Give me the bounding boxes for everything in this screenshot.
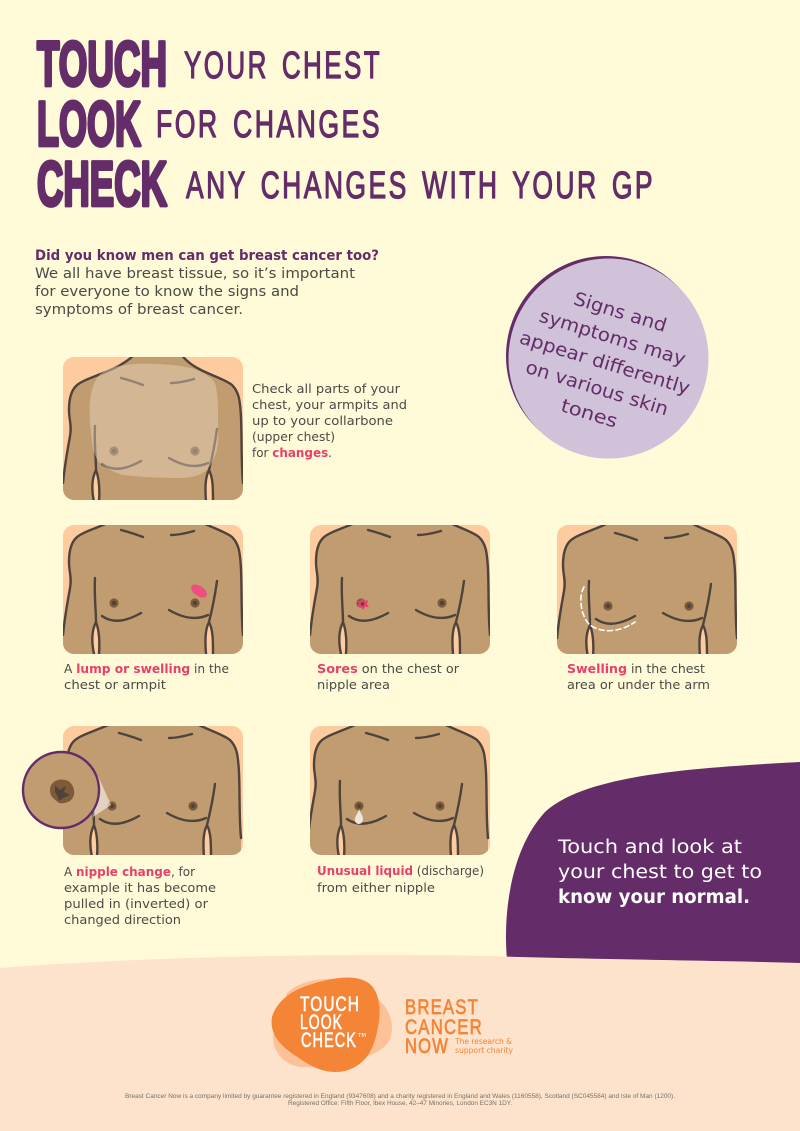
logo: breast cancer now: The research &: [454, 1037, 512, 1046]
logo: touch look check: CHECK: [301, 1029, 357, 1052]
title: [37, 30, 655, 220]
callout: skin tones: Signs and: [571, 289, 669, 337]
logo: touch look check: LOOK: [300, 1011, 343, 1034]
logo: breast cancer now: CANCER: [405, 1016, 483, 1039]
panel: nipple change: [22, 726, 243, 855]
caption: unusual liquid: Unusual liquid (discharge): [317, 863, 484, 878]
title: TOUCH: [37, 30, 167, 100]
title: LOOK: [37, 90, 141, 160]
panel: know your normal: Touch and look at: [557, 837, 742, 858]
panel: lump or swelling: [63, 525, 243, 654]
intro text: symptoms of breast cancer.: [35, 302, 243, 318]
callout: skin tones: [501, 256, 708, 458]
caption: swelling: [567, 661, 710, 692]
intro text: [35, 248, 379, 318]
logo: breast cancer now: support charity: [455, 1046, 513, 1055]
intro text: Did you know men can get breast cancer too?: [35, 248, 379, 264]
intro text: We all have breast tissue, so it’s important: [35, 266, 355, 282]
caption: lump or swelling: chest or armpit: [64, 677, 166, 692]
intro text: for everyone to know the signs and: [35, 284, 299, 300]
footer background: [0, 955, 800, 1131]
panel: check all parts: [63, 357, 243, 500]
text: check all parts: (upper chest): [252, 429, 335, 444]
text: check all parts: [252, 381, 407, 460]
logo: breast cancer now: NOW: [405, 1035, 449, 1058]
caption: unusual liquid: from either nipple: [317, 880, 435, 895]
panel: swelling: [557, 525, 737, 654]
logo: breast cancer now: BREAST: [405, 996, 479, 1019]
magnifier beam: [93, 776, 111, 817]
caption: nipple change: changed direction: [64, 912, 181, 927]
text: check all parts: Check all parts of your: [252, 381, 401, 396]
text: check all parts: for changes.: [252, 445, 332, 460]
caption: unusual liquid: [317, 863, 484, 895]
caption: sores: Sores on the chest or: [317, 661, 460, 676]
callout: skin tones: tones: [558, 396, 620, 433]
text: check all parts: up to your collarbone: [252, 413, 393, 428]
caption: nipple change: pulled in (inverted) or: [64, 896, 209, 911]
legal text: Registered Office: Fifth Floor, Ibex House, 42–47 Minories, London EC3N 1DY.: [288, 1101, 512, 1107]
title: CHECK: [37, 150, 167, 220]
caption: lump or swelling: A lump or swelling in the: [64, 661, 229, 676]
panel: know your normal: know your normal.: [558, 887, 750, 908]
caption: sores: nipple area: [317, 677, 390, 692]
caption: swelling: Swelling in the chest: [567, 661, 705, 676]
caption: swelling: area or under the arm: [567, 677, 710, 692]
panel: know your normal: your chest to get to: [558, 862, 762, 883]
panel: unusual liquid: [310, 726, 490, 855]
title: FOR CHANGES: [156, 104, 382, 146]
caption: nipple change: example it has become: [64, 880, 216, 895]
caption: lump or swelling: [64, 661, 229, 692]
caption: nipple change: A nipple change, for: [64, 864, 196, 879]
panel: know your normal: [506, 762, 800, 975]
panel: sores: [310, 525, 490, 654]
text: check all parts: chest, your armpits and: [252, 397, 407, 412]
magnified nipple: [23, 752, 99, 828]
logo: breast cancer now: [405, 996, 513, 1058]
callout: skin tones: appear differently: [517, 328, 692, 399]
caption: sores: [317, 661, 460, 692]
logo: touch look check: TOUCH: [300, 993, 360, 1016]
logo: touch look check: TM: [357, 1033, 366, 1039]
legal text: Breast Cancer Now is a company limited by guarantee registered in England (9347608) and a charity registered in England and Wales (1160558), Scotland (SC045584) and Isle of Man (1200).: [125, 1094, 675, 1100]
legal text: [125, 1094, 675, 1107]
callout: skin tones: on various skin: [523, 357, 671, 420]
callout: skin tones: symptoms may: [537, 306, 688, 370]
title: YOUR CHEST: [184, 45, 382, 87]
logo: touch look check: [272, 977, 392, 1072]
caption: nipple change: [64, 864, 216, 927]
